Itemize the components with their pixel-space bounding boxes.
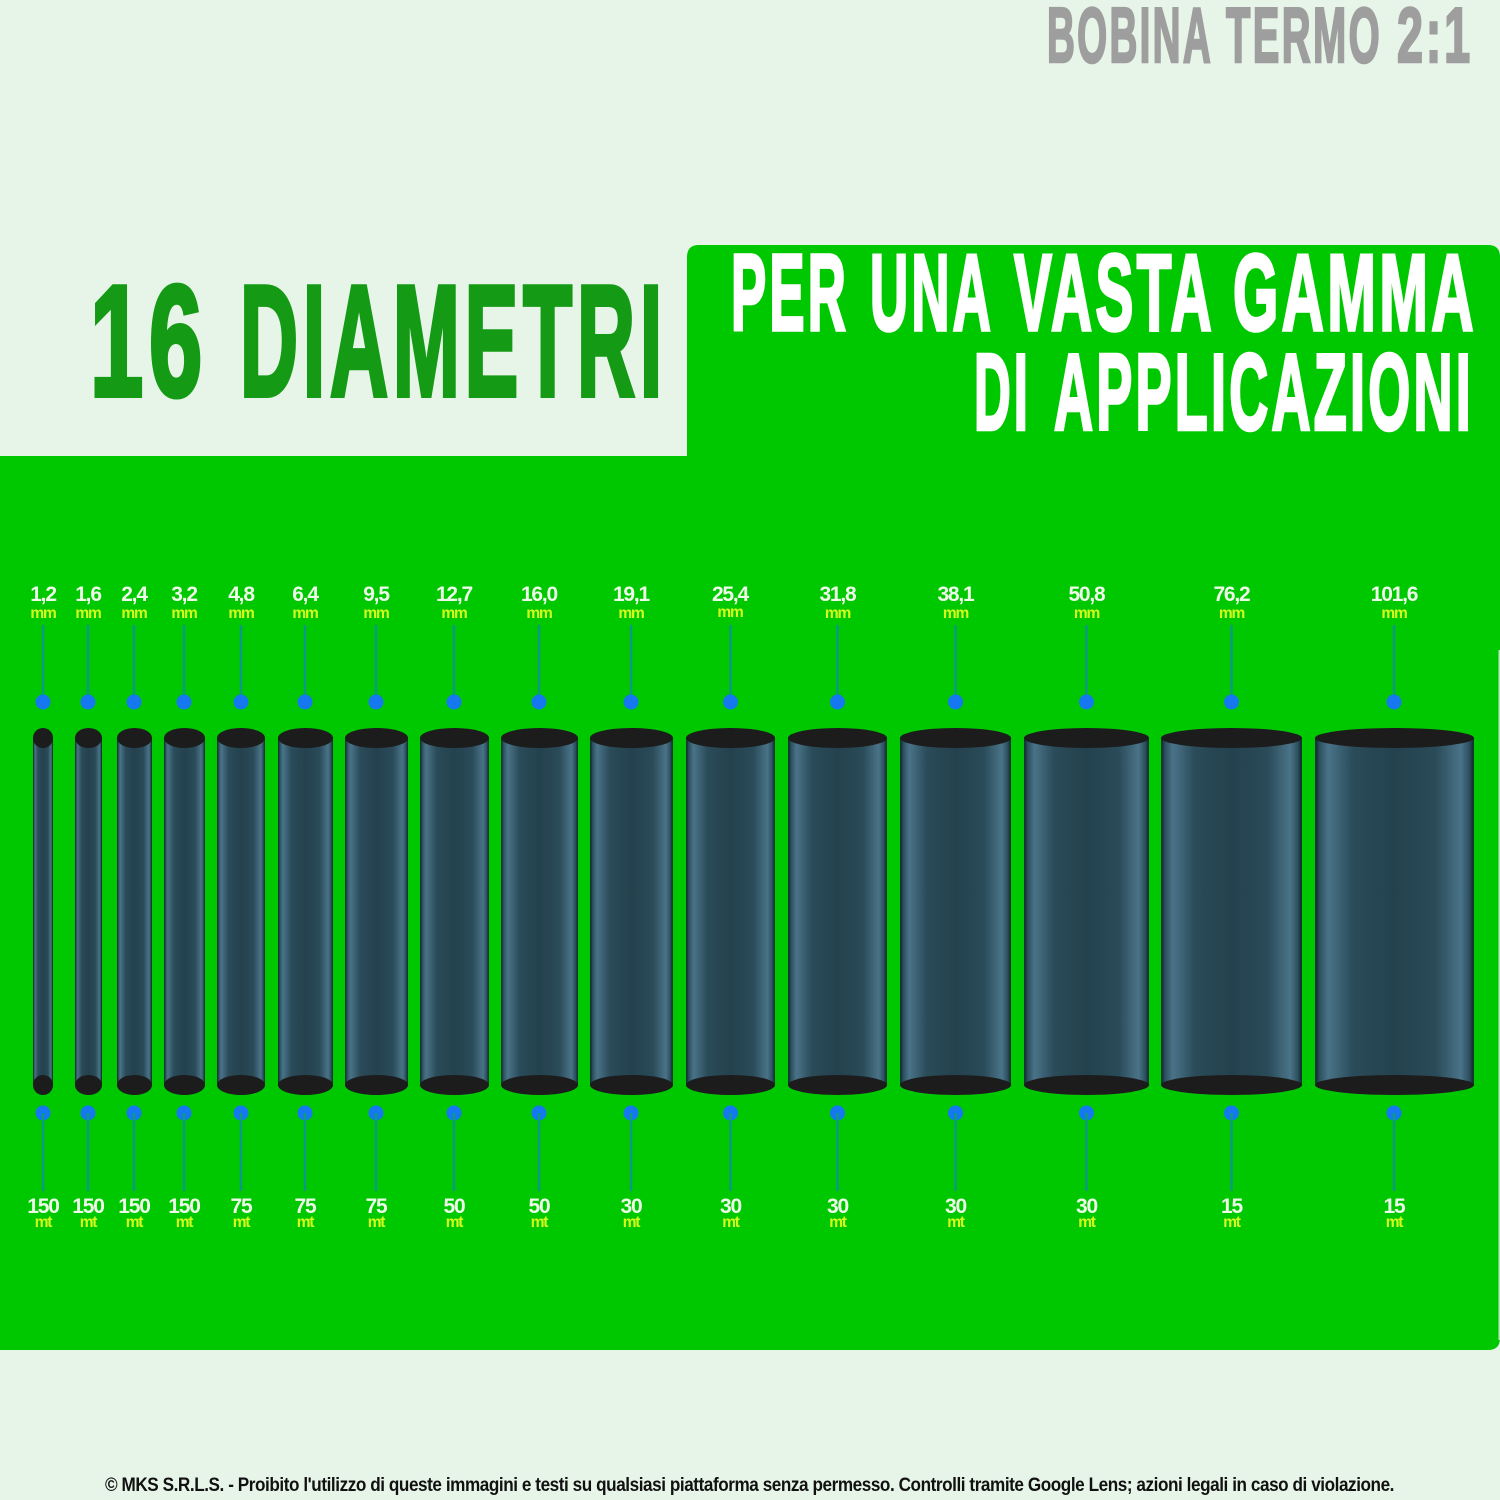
column: 19,1 mm, 30 mt: mm	[618, 605, 644, 622]
column: 16,0 mm, 50 mt: mm	[526, 605, 552, 622]
column: 12,7 mm, 50 mt: 12,7	[436, 583, 473, 606]
column: 50,8 mm, 30 mt	[1024, 583, 1149, 1231]
heading: 16 diametri: 16	[90, 254, 208, 430]
heading: per una vasta gamma di applicazioni: UNA	[870, 232, 994, 354]
column: 50,8 mm, 30 mt: 30	[1076, 1195, 1097, 1218]
heading: 16 diametri: DIAMETRI	[240, 254, 667, 430]
column: 50,8 mm, 30 mt: mm	[1074, 605, 1099, 622]
column: 4,8 mm, 75 mt	[217, 583, 265, 1231]
column: 101,6 mm, 15 mt: mm	[1381, 605, 1407, 622]
column: 38,1 mm, 30 mt: mm	[943, 605, 968, 622]
column: 76,2 mm, 15 mt	[1161, 583, 1302, 1231]
column: 2,4 mm, 150 mt: mm	[121, 605, 147, 622]
column: 9,5 mm, 75 mt: 9,5	[363, 583, 390, 606]
column: 31,8 mm, 30 mt: mm	[825, 605, 850, 622]
column: 1,6 mm, 150 mt: mm	[75, 605, 101, 622]
column: 3,2 mm, 150 mt: mt	[176, 1214, 193, 1231]
column: 101,6 mm, 15 mt: 15	[1384, 1195, 1406, 1218]
column: 38,1 mm, 30 mt	[900, 583, 1011, 1231]
column: 2,4 mm, 150 mt	[117, 583, 152, 1231]
column: 25,4 mm, 30 mt	[686, 583, 775, 1231]
column: 1,6 mm, 150 mt: 1,6	[75, 583, 101, 606]
column: 9,5 mm, 75 mt: 75	[366, 1195, 388, 1218]
column: 6,4 mm, 75 mt	[278, 583, 333, 1231]
column: 4,8 mm, 75 mt: 75	[231, 1195, 253, 1218]
right edge strip	[1498, 650, 1500, 1340]
column: 101,6 mm, 15 mt: 101,6	[1371, 583, 1418, 606]
column: 1,2 mm, 150 mt	[27, 583, 59, 1231]
column: 1,6 mm, 150 mt: 150	[72, 1195, 104, 1218]
column: 3,2 mm, 150 mt: mm	[171, 605, 197, 622]
column: 19,1 mm, 30 mt: 19,1	[613, 583, 651, 606]
panel: green background	[0, 245, 1500, 1350]
column: 1,2 mm, 150 mt: 150	[27, 1195, 59, 1218]
column: 31,8 mm, 30 mt: mt	[829, 1214, 847, 1231]
column: 101,6 mm, 15 mt: mt	[1386, 1214, 1403, 1231]
column: 9,5 mm, 75 mt: mt	[368, 1214, 385, 1231]
column: 38,1 mm, 30 mt: mt	[947, 1214, 965, 1231]
column: 25,4 mm, 30 mt: mm	[717, 604, 743, 621]
column: 16,0 mm, 50 mt	[501, 583, 578, 1231]
column: 16,0 mm, 50 mt: mt	[531, 1214, 548, 1231]
column: 4,8 mm, 75 mt: mt	[233, 1214, 250, 1231]
column: 19,1 mm, 30 mt: mt	[623, 1214, 640, 1231]
column: 1,2 mm, 150 mt: mm	[30, 605, 56, 622]
column: 1,6 mm, 150 mt: mt	[80, 1214, 97, 1231]
column: 6,4 mm, 75 mt: 6,4	[292, 583, 319, 606]
column: 12,7 mm, 50 mt: mm	[441, 605, 467, 622]
heading: per una vasta gamma di applicazioni	[731, 232, 1477, 454]
column: 9,5 mm, 75 mt: mm	[363, 605, 389, 622]
column: 12,7 mm, 50 mt: mt	[446, 1214, 463, 1231]
column: 1,2 mm, 150 mt: mt	[35, 1214, 52, 1231]
column: 16,0 mm, 50 mt: 16,0	[521, 583, 558, 606]
column: 3,2 mm, 150 mt: 3,2	[171, 583, 197, 606]
column: 101,6 mm, 15 mt	[1315, 583, 1474, 1231]
column: 25,4 mm, 30 mt: 30	[720, 1195, 741, 1218]
column: 31,8 mm, 30 mt: 31,8	[819, 583, 857, 606]
column: 25,4 mm, 30 mt: mt	[722, 1214, 740, 1231]
column: 31,8 mm, 30 mt	[788, 583, 887, 1231]
column: 76,2 mm, 15 mt: 76,2	[1213, 583, 1250, 606]
column: 50,8 mm, 30 mt: 50,8	[1068, 583, 1106, 606]
column: 4,8 mm, 75 mt: 4,8	[228, 583, 255, 606]
column: 6,4 mm, 75 mt: 75	[295, 1195, 317, 1218]
column: 50,8 mm, 30 mt: mt	[1078, 1214, 1096, 1231]
column: 16,0 mm, 50 mt: 50	[529, 1195, 550, 1218]
column: 12,7 mm, 50 mt	[420, 583, 489, 1231]
column: 9,5 mm, 75 mt	[345, 583, 408, 1231]
column: 2,4 mm, 150 mt: 2,4	[121, 583, 148, 606]
column: 38,1 mm, 30 mt: 38,1	[937, 583, 975, 606]
column: 76,2 mm, 15 mt: mt	[1223, 1214, 1241, 1231]
column: 25,4 mm, 30 mt: 25,4	[712, 583, 750, 606]
column: 2,4 mm, 150 mt: mt	[126, 1214, 143, 1231]
heading: 16 diametri	[90, 254, 667, 430]
column: 3,2 mm, 150 mt	[164, 583, 205, 1231]
column: 76,2 mm, 15 mt: 15	[1221, 1195, 1243, 1218]
column: 76,2 mm, 15 mt: mm	[1219, 605, 1244, 622]
column: 6,4 mm, 75 mt: mm	[292, 605, 318, 622]
column: 2,4 mm, 150 mt: 150	[118, 1195, 150, 1218]
column: 1,2 mm, 150 mt: 1,2	[30, 583, 56, 606]
column: 38,1 mm, 30 mt: 30	[945, 1195, 966, 1218]
heading: per una vasta gamma di applicazioni: PER	[731, 232, 849, 354]
column: 1,6 mm, 150 mt	[72, 583, 104, 1231]
column: 31,8 mm, 30 mt: 30	[827, 1195, 848, 1218]
column: 19,1 mm, 30 mt	[590, 583, 673, 1231]
column: 6,4 mm, 75 mt: mt	[297, 1214, 314, 1231]
heading: per una vasta gamma di applicazioni: VASTA	[1014, 232, 1215, 354]
column: 3,2 mm, 150 mt: 150	[168, 1195, 200, 1218]
column: 19,1 mm, 30 mt: 30	[621, 1195, 642, 1218]
column: 12,7 mm, 50 mt: 50	[444, 1195, 465, 1218]
column: 4,8 mm, 75 mt: mm	[228, 605, 254, 622]
heading: per una vasta gamma di applicazioni: DI	[974, 332, 1031, 454]
